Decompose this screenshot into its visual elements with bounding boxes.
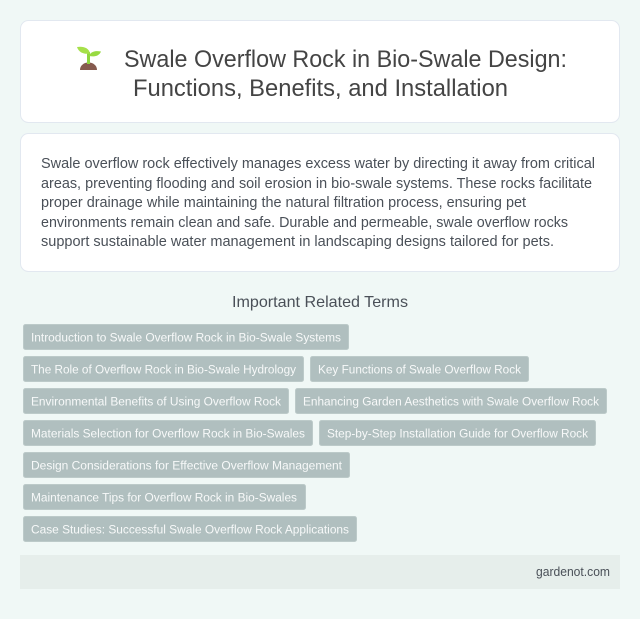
tag: Design Considerations for Effective Overflow Management bbox=[31, 458, 343, 472]
tag: Key Functions of Swale Overflow Rock bbox=[318, 362, 522, 376]
text block: summary bbox=[41, 156, 595, 250]
tag: Introduction to Swale Overflow Rock in Bio-Swale Systems bbox=[31, 330, 341, 344]
title bbox=[124, 46, 567, 102]
tag bbox=[24, 420, 312, 446]
footer: gardenot.com bbox=[536, 564, 610, 579]
tag bbox=[310, 356, 528, 382]
panel: header bbox=[20, 20, 620, 122]
tag bbox=[24, 484, 306, 510]
tag: Environmental Benefits of Using Overflow Rock bbox=[31, 394, 282, 408]
text block: summary: support sustainable water management in landscaping designs tailored for pets. bbox=[41, 234, 554, 250]
text block: summary: Swale overflow rock effectively manages excess water by directing it away from critical bbox=[41, 156, 595, 172]
tag bbox=[24, 324, 348, 350]
tag: The Role of Overflow Rock in Bio-Swale Hydrology bbox=[31, 362, 297, 376]
tag bbox=[320, 420, 596, 446]
tag: Case Studies: Successful Swale Overflow Rock Applications bbox=[31, 522, 349, 536]
text block: summary: environments remain clean and safe. Durable and permeable, swale overflow rocks bbox=[41, 215, 568, 231]
tag: Maintenance Tips for Overflow Rock in Bio-Swales bbox=[31, 490, 297, 504]
tag: Materials Selection for Overflow Rock in Bio-Swales bbox=[31, 426, 305, 440]
tag bbox=[24, 516, 356, 542]
panel: summary text bbox=[20, 134, 620, 272]
tag bbox=[24, 452, 350, 478]
title: Swale Overflow Rock in Bio-Swale Design: bbox=[124, 46, 567, 73]
tag: Enhancing Garden Aesthetics with Swale Overflow Rock bbox=[303, 394, 600, 408]
title: Functions, Benefits, and Installation bbox=[133, 75, 508, 102]
footer bbox=[20, 555, 620, 589]
heading: related terms: Important Related Terms bbox=[232, 294, 408, 311]
text block: summary: areas, preventing flooding and soil erosion in bio-swale systems. These rocks facilitate bbox=[41, 176, 592, 192]
tag bbox=[296, 388, 606, 414]
tag list bbox=[24, 324, 606, 542]
text block: summary: proper drainage while maintaining the natural filtration process, ensuring pet bbox=[41, 195, 526, 211]
tag bbox=[24, 388, 288, 414]
icon: sprout bbox=[77, 47, 101, 70]
tag: Step-by-Step Installation Guide for Overflow Rock bbox=[327, 426, 589, 440]
tag bbox=[24, 356, 304, 382]
